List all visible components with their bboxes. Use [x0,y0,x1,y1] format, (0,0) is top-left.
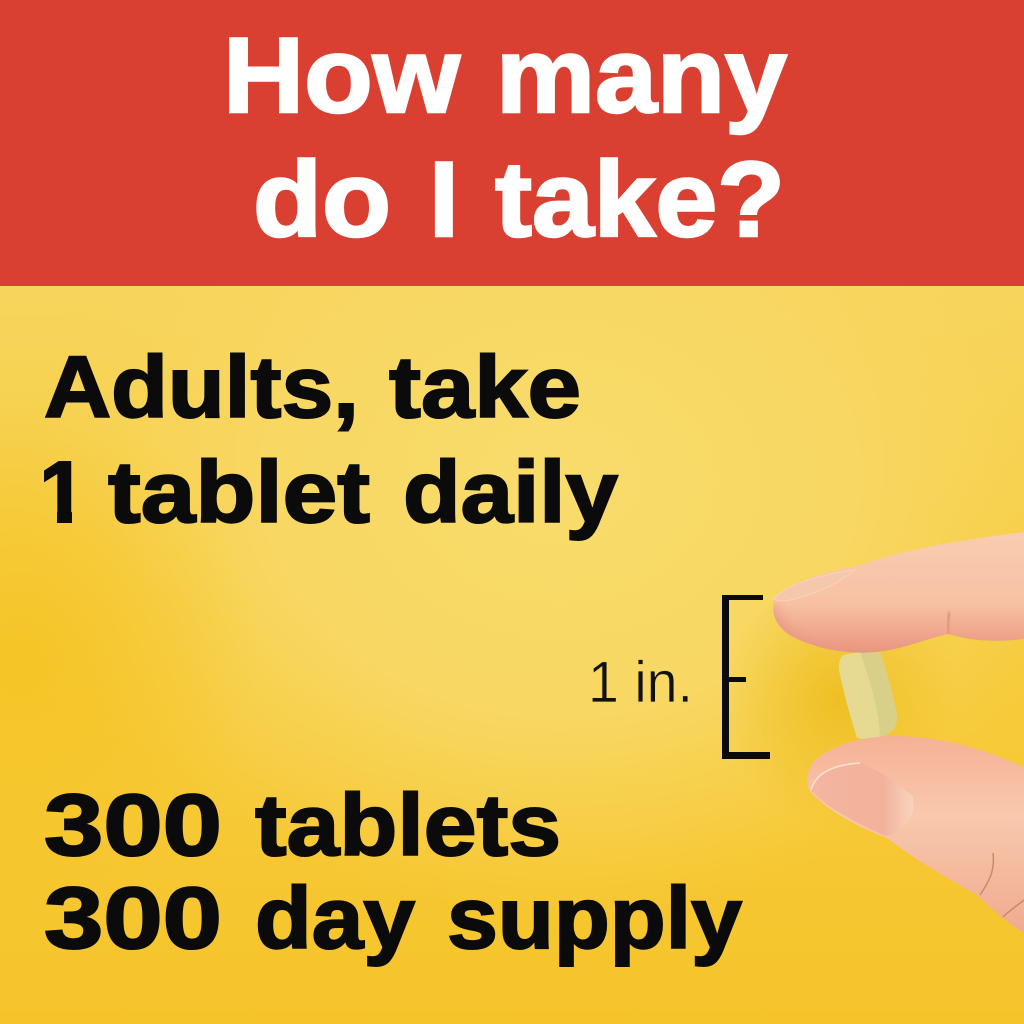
lower fingernail [811,763,913,836]
dosage text: take [389,339,581,436]
upper finger [760,532,1024,660]
supply text: 300 [44,870,222,967]
background [0,286,1024,1024]
supply text [44,777,742,967]
lower finger [807,736,1024,933]
size bracket [722,595,770,759]
supply text: day [255,870,415,967]
title [223,15,787,259]
title: I [429,139,459,259]
title: do [253,139,391,259]
dosage text: tablet [108,444,370,541]
tablet [839,652,897,739]
title: many [496,15,787,135]
supply text: tablets [255,777,561,874]
size label: 1 in. [588,650,693,715]
title: How [223,15,461,135]
dosage text [38,339,618,541]
dosage text: daily [403,444,618,541]
upper fingernail [773,570,855,601]
header band [0,0,1024,286]
title: take? [495,139,785,259]
dosage text: Adults, [44,339,359,436]
dosage text: 1 [38,444,86,541]
supply text: supply [447,870,742,967]
supply text: 300 [44,777,222,874]
